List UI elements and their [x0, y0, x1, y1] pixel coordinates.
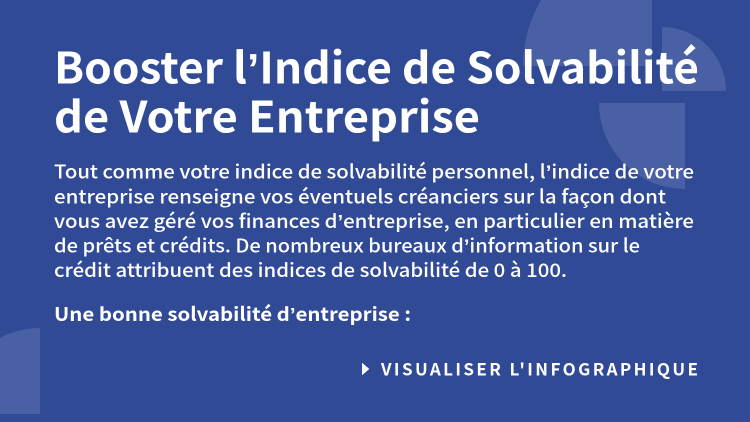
call to action: [362, 356, 698, 380]
intro paragraph: [54, 158, 694, 283]
decorative quarter circles, top right: [523, 0, 726, 189]
title: de Votre Entreprise: [54, 84, 480, 146]
title: Booster l’Indice de Solvabilité: [54, 34, 699, 96]
title: [54, 34, 699, 146]
call to action label: VISUALISER L'INFOGRAPHIQUE: [380, 356, 698, 380]
intro paragraph: crédit attribuent des indices de solvabilité de 0 à 100.: [54, 256, 567, 283]
intro paragraph: vous avez géré vos finances d ’entreprise, en particulier en matière: [54, 207, 694, 234]
decorative quarter circle, bottom left: [0, 328, 40, 414]
intro paragraph: de prêts et crédits. De nombreux bureaux d ’information sur le: [54, 232, 640, 258]
icon: play triangle: [362, 363, 369, 375]
intro paragraph: Tout comme votre indice de solvabilité personnel, l ’indice de votre: [54, 158, 694, 184]
intro paragraph: entreprise renseigne vos éventuels créanciers sur la façon dont: [54, 182, 667, 210]
subheading: Une bonne solvabilité d ’entreprise :: [54, 300, 411, 327]
